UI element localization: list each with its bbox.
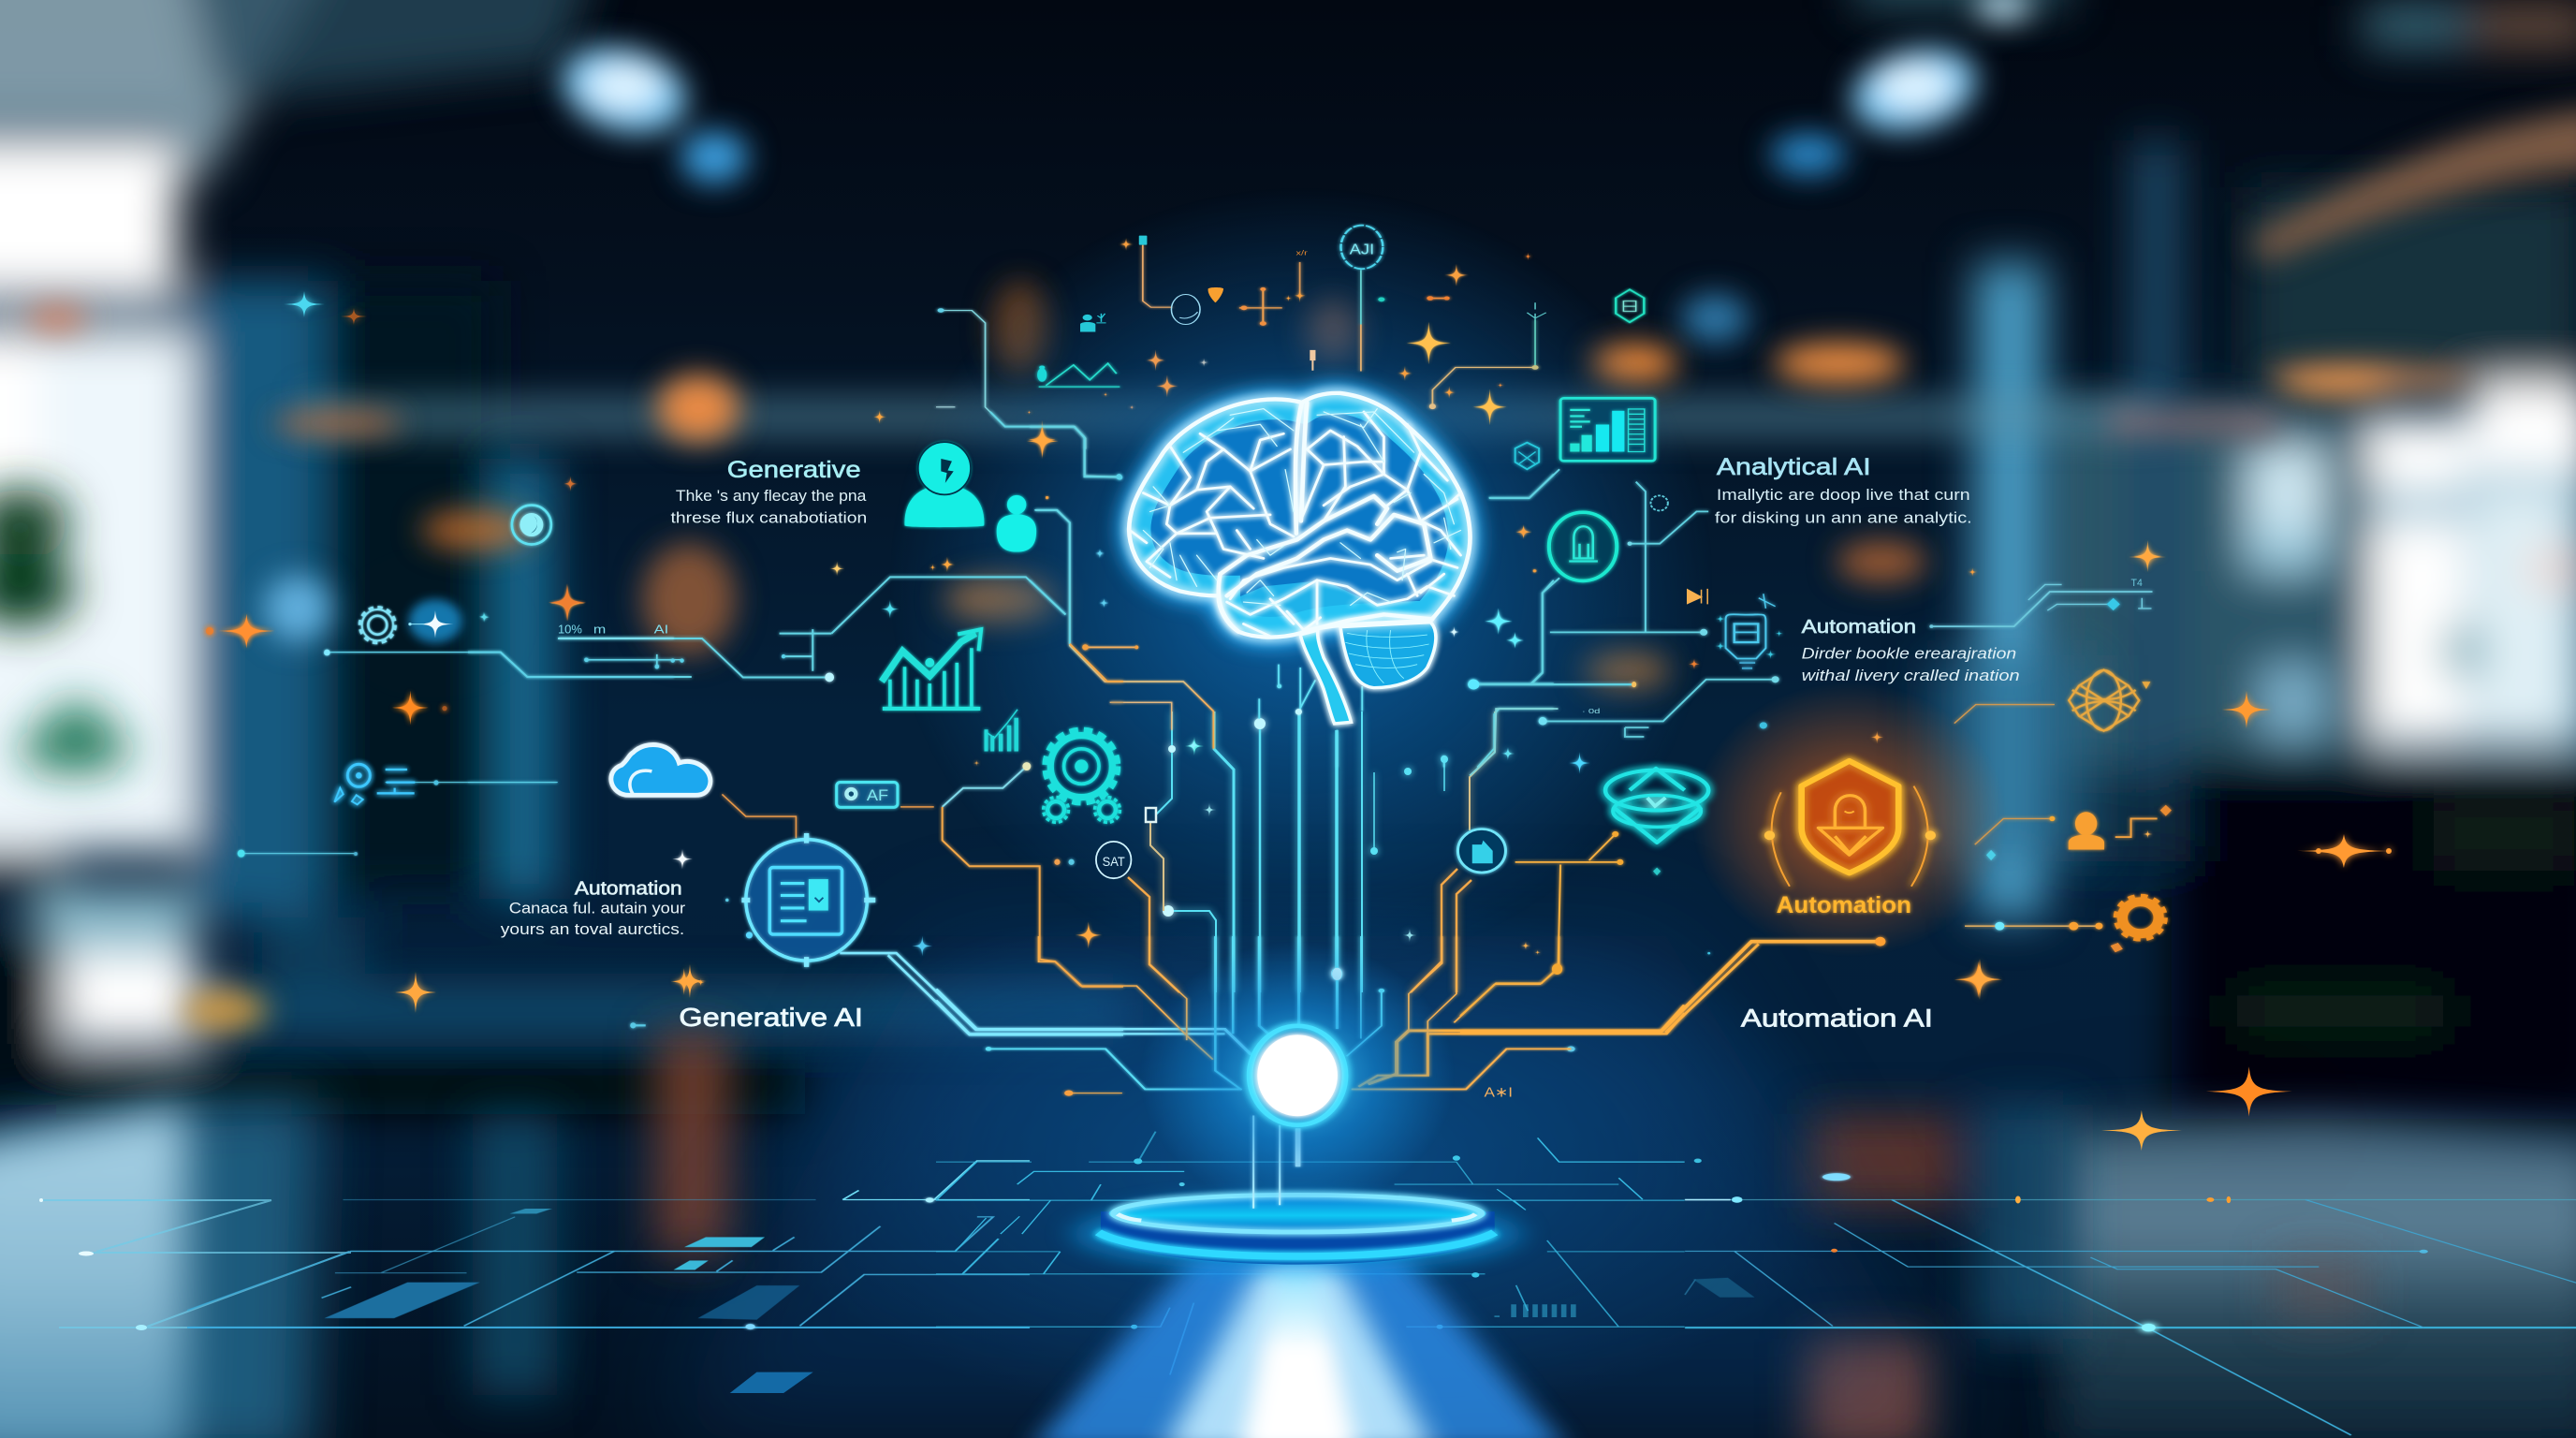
icon: amber globe [2069, 670, 2150, 731]
connector lines [936, 245, 1539, 449]
amber trunk lines [1039, 936, 1685, 1096]
icon: small white chip [1146, 808, 1156, 822]
icon: linked gears [334, 764, 415, 804]
icon: teal lock circle [1549, 512, 1617, 580]
icon: large person [904, 442, 984, 527]
icon: SAT circle: SAT [1103, 855, 1125, 869]
central vertical data lines [1128, 712, 1515, 992]
cyan trunk lines [936, 936, 1574, 1209]
left connector lines [468, 412, 1123, 1028]
icon: cloud [611, 745, 710, 795]
icon: tiny gear [1650, 495, 1668, 510]
hazy horizontal band [300, 393, 2276, 440]
right columns [1853, 0, 2576, 917]
icon: rising bar chart [882, 629, 981, 709]
brain lighter rim [1129, 393, 1470, 638]
bright cyan flare [408, 599, 461, 643]
heading: Automation right: Automation [1802, 615, 1916, 637]
sparkle stars [1486, 526, 2162, 998]
icon: person with flag [1080, 314, 1106, 332]
light beam below platform [1032, 1256, 1566, 1438]
right reflective floor [2059, 1119, 2576, 1438]
icon: SAT circle [1096, 842, 1131, 878]
icon: small fork [1527, 302, 1546, 320]
icon: teal hexagon badge [1616, 289, 1644, 322]
icon: orange pick [1208, 287, 1223, 302]
icon: AI medallion: AJI [1350, 242, 1374, 257]
scattered sparkles [284, 291, 2392, 1013]
panel: right content [1457, 398, 2172, 1033]
central glowing node [1140, 941, 1455, 1210]
brain connection lines [1030, 427, 1554, 768]
ceiling lights [552, 0, 2031, 343]
cyan connector from document icon [840, 953, 1123, 1034]
brain stem [1300, 630, 1351, 724]
icon: glowing brain [1129, 393, 1470, 724]
floor circuit grid: far left [39, 1198, 351, 1330]
text: automation right description: Dirder bookle erearajration [1802, 645, 2016, 662]
icon: AF badge: AF [867, 786, 888, 804]
icon: mini line chart [1037, 363, 1120, 387]
icon: AF badge [837, 783, 898, 807]
text: automation right description [1802, 645, 2020, 684]
text: automation right description: withal livery cralled ination [1802, 667, 2020, 684]
brain outline [1129, 393, 1470, 638]
icon: square marker [1139, 236, 1147, 245]
floor circuit grid: right [1685, 1066, 2576, 1435]
icon: main gear [1044, 731, 1120, 822]
sparkle stars [1027, 238, 1530, 459]
cerebellum [1340, 623, 1436, 688]
icon: small person [997, 495, 1036, 552]
heading: Automation AI: Automation AI [1741, 1005, 1933, 1033]
glowing platform [1073, 1194, 1522, 1272]
icon: planet ring [1171, 295, 1200, 325]
diagonal amber streak [2248, 108, 2576, 262]
icon: thumbtack [1310, 350, 1315, 371]
text: generative description: threse flux canabotiation [671, 508, 867, 526]
icon: lightbulb chip [1726, 594, 1776, 668]
amber connectors [1460, 705, 2172, 1033]
text: generative description: Thke 's any flecay the pna [676, 487, 867, 505]
icon: hex gear [1515, 443, 1539, 469]
icon: amber person [2069, 812, 2104, 849]
sparkle stars [479, 410, 1108, 995]
text: generative description [671, 487, 867, 526]
top centre icon cluster [936, 226, 1644, 459]
left window wall [0, 0, 1128, 1114]
text: automation left description [501, 900, 685, 938]
text: analytical description: Imallytic are doop live that curn [1717, 486, 1970, 504]
brain outer glow [1129, 393, 1470, 638]
brain veins [1130, 403, 1461, 637]
left reflective floor [0, 1097, 318, 1438]
heading: Automation amber: Automation [1777, 892, 1911, 917]
heading: Generative AI: Generative AI [679, 1003, 863, 1032]
central data lines [936, 936, 1685, 1209]
chart labels: 10% m AI: AI [654, 623, 668, 637]
icon: small gear [360, 608, 395, 642]
chart labels: 10% m AI: m [593, 623, 606, 637]
heading: Automation left: Automation [575, 878, 682, 900]
heading: Analytical AI: Analytical AI [1717, 454, 1871, 480]
left light accents [27, 305, 331, 1031]
icon: small bar chart [986, 710, 1017, 751]
panel: left content [468, 410, 1131, 1034]
icon: amber gear [2111, 897, 2164, 952]
chart labels: 10% m AI: 10% [558, 623, 582, 637]
amber bokeh [271, 281, 2471, 689]
floor circuit grid: centre [936, 1132, 1685, 1375]
heading: Generative: Generative [727, 457, 861, 483]
panel: far left icons [206, 583, 674, 858]
stars near brain [1046, 496, 1536, 757]
right windows [2041, 140, 2576, 1119]
icon: document in circle [741, 833, 875, 967]
icon: ringed dot [512, 506, 551, 545]
icon: ring triangle [1605, 769, 1708, 843]
icon: dashboard panel [1560, 398, 1655, 461]
text: automation left description: Canaca ful. autain your [509, 900, 685, 917]
text: analytical description: for disking un ann ane analytic. [1715, 508, 1972, 526]
floor circuit grid: left [187, 1161, 1030, 1393]
left foliage [0, 489, 131, 771]
cerebellum folds [1345, 630, 1429, 683]
amber halo behind shield [1691, 682, 2007, 958]
right connector lines [1468, 469, 2153, 955]
far-left connector lines [238, 638, 674, 858]
icon: AI medallion [1340, 226, 1383, 269]
label: T4: T4 [2131, 579, 2143, 589]
icon: cyan small circle [1457, 829, 1505, 873]
label: A*I: A∗I [1484, 1085, 1513, 1101]
sparkle stars [479, 583, 586, 623]
brain fill [1129, 393, 1470, 638]
icon: orange bowtie [1688, 589, 1707, 604]
text: automation left description: yours an toval aurctics. [501, 920, 684, 938]
icon: amber shield [1764, 761, 1936, 887]
chart labels: 10% m AI [558, 623, 668, 637]
text: analytical description [1715, 486, 1972, 526]
floor glow and reflections [473, 1030, 2368, 1438]
orange flares [206, 614, 447, 725]
label: 0d: · 0d [1582, 707, 1600, 715]
small amber glyphs: x/r [1296, 249, 1308, 257]
